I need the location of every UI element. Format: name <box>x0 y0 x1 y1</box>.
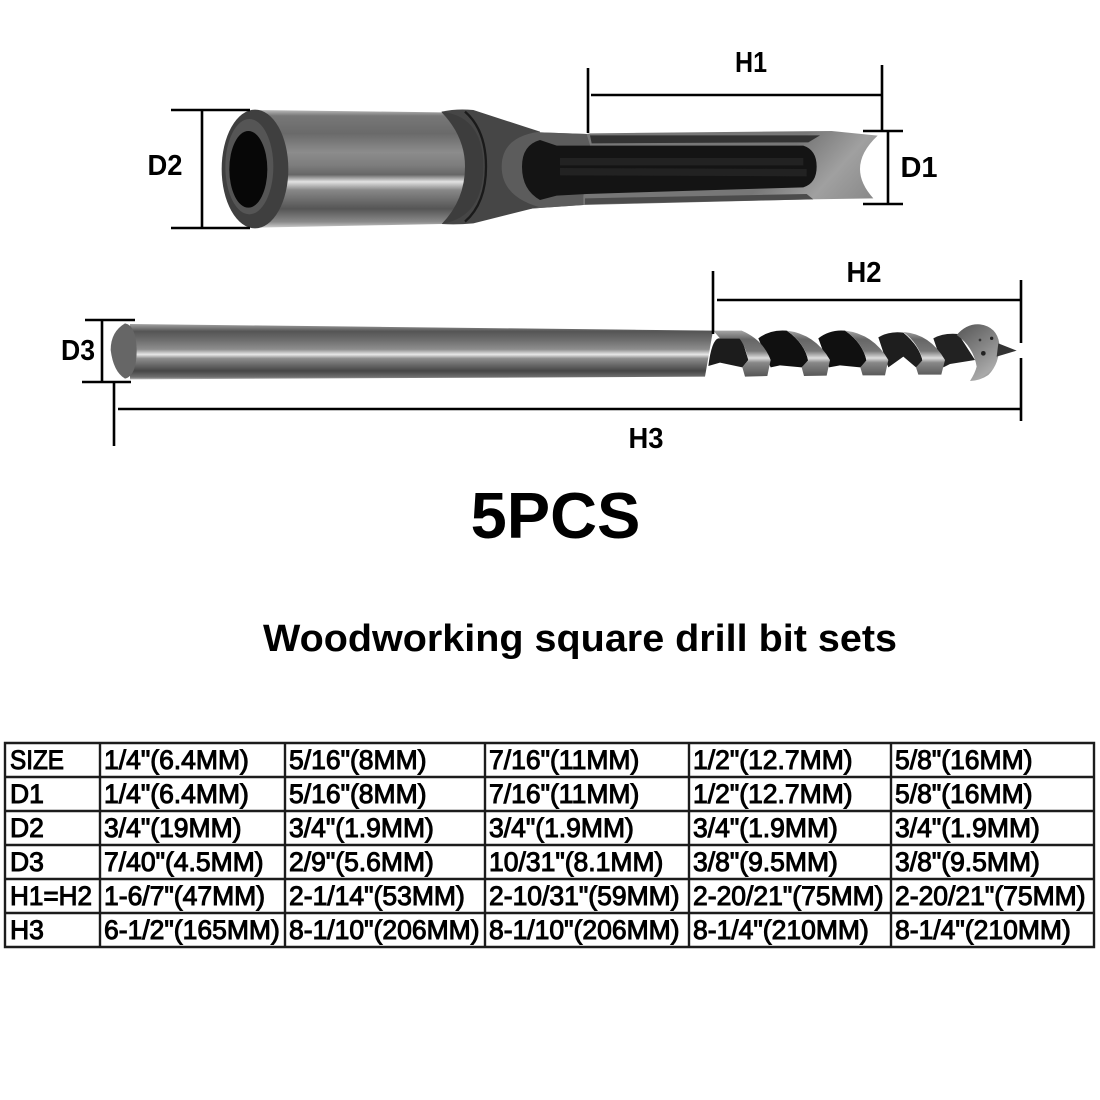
mortise chisel illustration <box>222 109 878 228</box>
size specification table <box>5 743 1094 947</box>
dimension H1 <box>588 47 882 133</box>
dimension H1: H1 <box>735 47 767 79</box>
dimension H3 <box>114 358 1021 455</box>
row: H3: 8-1/10"(206MM) <box>289 915 480 945</box>
chisel square shaft <box>520 131 878 209</box>
row: SIZE: 1/4"(6.4MM) <box>104 745 249 775</box>
row: H3: 8-1/4"(210MM) <box>895 915 1071 945</box>
row: D3 <box>10 847 1040 877</box>
row: SIZE <box>10 745 1033 775</box>
dimension D1: D1 <box>900 152 938 184</box>
row: D3: 3/8"(9.5MM) <box>895 847 1040 877</box>
product title: Woodworking square drill bit sets <box>263 618 897 660</box>
row: H1=H2: 2-20/21"(75MM) <box>693 881 884 911</box>
row: H3: H3 <box>10 915 44 945</box>
row: D3: 3/8"(9.5MM) <box>693 847 838 877</box>
row: D2: 3/4"(1.9MM) <box>693 813 838 843</box>
dimension D3: D3 <box>61 335 95 367</box>
quantity heading: 5PCS <box>471 479 640 552</box>
row: D2: 3/4"(1.9MM) <box>895 813 1040 843</box>
row: D1: 1/4"(6.4MM) <box>104 779 249 809</box>
row: H3: 8-1/4"(210MM) <box>693 915 869 945</box>
row: SIZE: 5/8"(16MM) <box>895 745 1033 775</box>
row: H1=H2: 2-10/31"(59MM) <box>489 881 680 911</box>
row: D1: 5/8"(16MM) <box>895 779 1033 809</box>
row: D1: 5/16"(8MM) <box>289 779 427 809</box>
dimension H3: H3 <box>628 423 664 455</box>
dimension D2 <box>148 110 250 228</box>
row: H1=H2: H1=H2 <box>10 881 92 911</box>
chisel shoulder and collar <box>442 109 540 224</box>
row: D2: D2 <box>10 813 44 843</box>
auger drill bit illustration <box>111 323 1017 381</box>
row: H3: 6-1/2"(165MM) <box>104 915 280 945</box>
drill bit round shank <box>111 323 713 379</box>
row: D3: 7/40"(4.5MM) <box>104 847 264 877</box>
row: D1 <box>10 779 1033 809</box>
drill bit spiral flutes and tip <box>708 324 1017 381</box>
row: H1=H2: 2-20/21"(75MM) <box>895 881 1086 911</box>
row: H1=H2 <box>10 881 1086 911</box>
row: SIZE: 1/2"(12.7MM) <box>693 745 853 775</box>
chisel slot <box>522 140 817 200</box>
row: H1=H2: 2-1/14"(53MM) <box>289 881 465 911</box>
dimension H2: H2 <box>846 257 882 289</box>
dimension H2 <box>713 257 1021 343</box>
row: D2: 3/4"(19MM) <box>104 813 242 843</box>
chisel cylinder body <box>222 110 465 228</box>
row: D2: 3/4"(1.9MM) <box>289 813 434 843</box>
dimension D1 <box>863 131 938 204</box>
dimension D2: D2 <box>148 150 182 182</box>
row: D1: D1 <box>10 779 44 809</box>
row: D1: 1/2"(12.7MM) <box>693 779 853 809</box>
row: D3: 10/31"(8.1MM) <box>489 847 663 877</box>
row: H1=H2: 1-6/7"(47MM) <box>104 881 265 911</box>
row: SIZE: 7/16"(11MM) <box>489 745 639 775</box>
row: D3: 2/9"(5.6MM) <box>289 847 434 877</box>
row: SIZE: SIZE <box>10 745 64 775</box>
row: D2 <box>10 813 1040 843</box>
row: D1: 7/16"(11MM) <box>489 779 639 809</box>
dimension D3 <box>61 320 135 382</box>
row: H3 <box>10 915 1071 945</box>
row: D2: 3/4"(1.9MM) <box>489 813 634 843</box>
row: SIZE: 5/16"(8MM) <box>289 745 427 775</box>
row: D3: D3 <box>10 847 44 877</box>
row: H3: 8-1/10"(206MM) <box>489 915 680 945</box>
